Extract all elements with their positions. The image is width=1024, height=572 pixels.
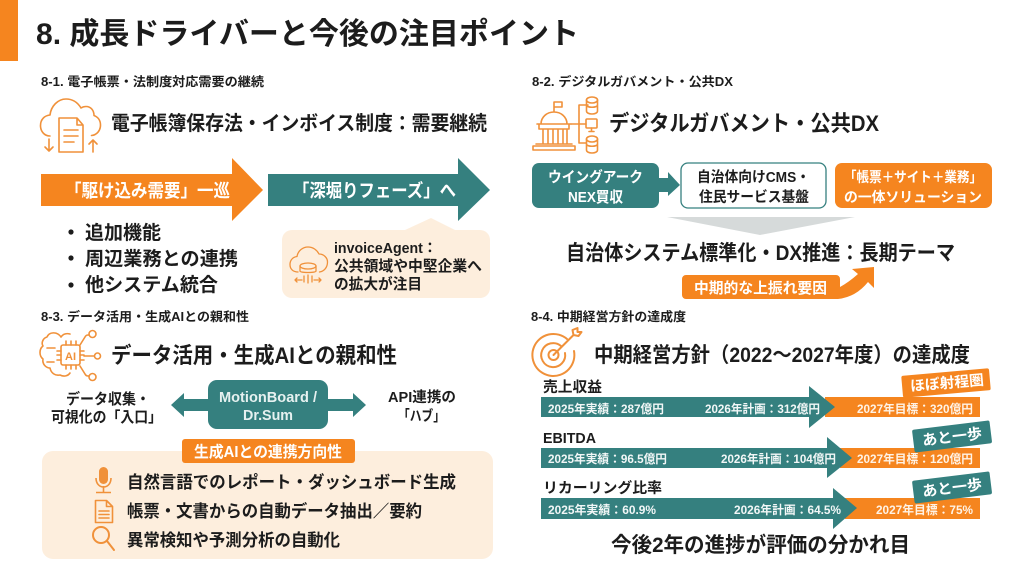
box: integrated solution: の一体ソリューション: [844, 189, 982, 205]
icon: document: [96, 500, 112, 522]
icon text: AI: AI: [65, 351, 76, 363]
callout: invoiceAgent: の拡大が注目: [334, 275, 422, 293]
heading 8-1: 電子帳簿保存法・インボイス制度：需要継続: [111, 112, 487, 135]
box: Wingarc NEX acquisition: [532, 163, 659, 208]
tag: one more step: [912, 420, 992, 453]
bullet list: 追加機能: [85, 222, 161, 244]
tag: almost in range: ほぼ射程圏: [909, 371, 985, 395]
panel: 8-3 data and generative AI: [40, 309, 493, 559]
box: Wingarc NEX acquisition: NEX買収: [568, 189, 623, 206]
title: 8. 成長ドライバーと今後の注目ポイント: [36, 18, 579, 51]
box: municipal CMS: [681, 163, 826, 208]
row: EBITDA: 2027年目標：120億円: [857, 451, 973, 466]
row: EBITDA: 2025年実績：96.5億円: [548, 451, 667, 466]
heading 8-3: データ活用・生成AIとの親和性: [111, 343, 397, 368]
heading 8-2: デジタルガバメント・公共DX: [609, 111, 879, 136]
right label: API hub: 「ハブ」: [398, 407, 445, 425]
arrow: deep-dive phase: 「深堀りフェーズ」へ: [293, 180, 456, 201]
icon: cloud document: [40, 99, 100, 152]
text: report generation: 自然言語でのレポート・ダッシュボード生成: [127, 472, 456, 492]
right label: API hub: [388, 388, 456, 425]
section label 8-2: 8-2. デジタルガバメント・公共DX: [532, 74, 734, 89]
box: integrated solution: [835, 163, 992, 208]
box: MotionBoard / Dr.Sum: [208, 380, 328, 429]
row: revenue: 2025年実績：287億円: [548, 401, 664, 416]
row: revenue: 2027年目標：320億円: [857, 401, 973, 416]
converge triangle: [667, 217, 855, 235]
double arrow: [171, 393, 366, 417]
right label: API hub: API連携の: [388, 388, 456, 406]
row: recurring ratio: リカーリング比率: [543, 479, 662, 497]
bullet list: [68, 222, 238, 296]
arrow: rush demand: 「駆け込み需要」一巡: [65, 181, 230, 201]
row: EBITDA: 2026年計画：104億円: [721, 451, 836, 466]
left label: data entrance: 可視化の「入口」: [51, 409, 162, 426]
row: EBITDA: [541, 420, 992, 478]
accent bar: [0, 0, 18, 61]
text: anomaly detection: 異常検知や予測分析の自動化: [127, 530, 340, 550]
arrow: rush demand: [41, 158, 263, 221]
row: revenue: 売上収益: [543, 379, 603, 396]
icon: microphone: [96, 467, 111, 492]
box: integrated solution: 「帳票＋サイト＋業務」: [844, 169, 982, 185]
icon: small cloud database: [290, 247, 328, 283]
row: recurring ratio: 2026年計画：64.5%: [734, 502, 841, 517]
icon: AI brain: [40, 330, 100, 380]
tag: one more step: あと一歩: [921, 424, 983, 450]
callout: upside factor with arrow: 中期的な上振れ要因: [694, 279, 827, 297]
callout: invoiceAgent: [282, 218, 490, 298]
tag: one more step: [912, 471, 992, 504]
left label: data entrance: データ収集・: [66, 390, 150, 408]
bullet list: 周辺業務との連携: [85, 248, 238, 270]
callout: invoiceAgent: invoiceAgent：: [334, 241, 437, 257]
tag: almost in range: [901, 368, 991, 398]
box: MotionBoard / Dr.Sum: Dr.Sum: [243, 408, 293, 424]
box: municipal CMS: 住民サービス基盤: [699, 188, 809, 206]
row: recurring ratio: 2025年実績：60.9%: [548, 502, 656, 517]
row: recurring ratio: 2027年目標：75%: [876, 502, 973, 517]
panel: generative AI directions: [42, 439, 493, 559]
bullet list: 他システム統合: [85, 274, 218, 296]
conclusion: 今後2年の進捗が評価の分かれ目: [611, 533, 910, 557]
section label 8-1: 8-1. 電子帳票・法制度対応需要の継続: [41, 74, 265, 89]
row: recurring ratio: [541, 471, 992, 529]
row: revenue: 2026年計画：312億円: [705, 401, 820, 416]
tag: one more step: あと一歩: [921, 475, 983, 501]
callout: upside factor with arrow: [682, 267, 874, 299]
section label 8-4: 8-4. 中期経営方針の達成度: [531, 309, 687, 324]
section label 8-3: 8-3. データ活用・生成AIとの親和性: [41, 309, 250, 324]
panel: 8-4 mid-term plan: [531, 309, 992, 557]
text: data extraction: 帳票・文書からの自動データ抽出／要約: [127, 501, 422, 521]
box: municipal CMS: 自治体向けCMS・: [697, 168, 810, 186]
icon: magnifier: [93, 527, 114, 550]
box: Wingarc NEX acquisition: ウイングアーク: [548, 168, 643, 186]
icon: target: [532, 328, 582, 376]
row: revenue: [541, 368, 991, 428]
arrow: to CMS box: [658, 172, 680, 196]
box: MotionBoard / Dr.Sum: MotionBoard /: [219, 390, 317, 406]
panel: 8-1 electronic forms: [40, 74, 490, 298]
panel: 8-2 digital government: [532, 74, 992, 299]
heading 8-4: 中期経営方針（2022～2027年度）の達成度: [594, 343, 970, 367]
arrow: deep-dive phase: [268, 158, 490, 221]
icon: government building with network: [533, 97, 598, 153]
callout: invoiceAgent: 公共領域や中堅企業へ: [334, 257, 482, 275]
long-term theme: 自治体システム標準化・DX推進：長期テーマ: [566, 242, 955, 265]
row: EBITDA: EBITDA: [543, 431, 597, 447]
label: generative AI direction: 生成AIとの連携方向性: [194, 442, 342, 461]
left label: data entrance: [51, 390, 162, 426]
label: generative AI direction: [182, 439, 355, 463]
